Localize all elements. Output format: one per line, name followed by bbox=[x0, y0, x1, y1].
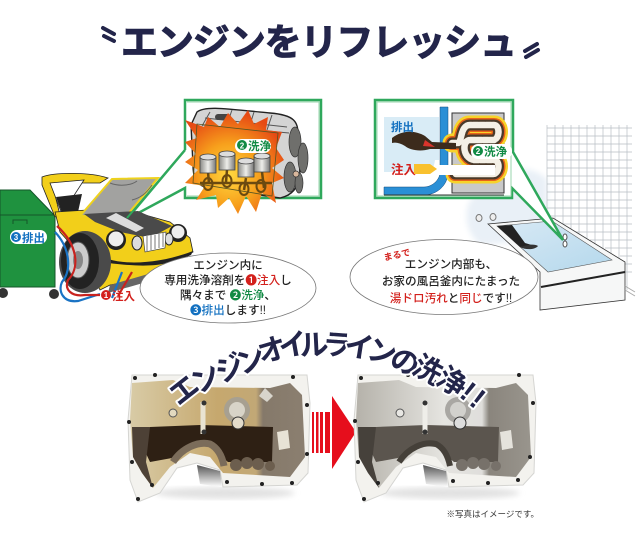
callout: engine explanation: 専用洗浄溶剤を❶注入し bbox=[164, 273, 292, 287]
panel: bathtub analogy bbox=[350, 100, 635, 314]
light blue water bbox=[384, 117, 439, 186]
panel: before and after oil pan bbox=[127, 328, 539, 519]
photo: before oil pan bbox=[127, 373, 310, 502]
arched heading: ン bbox=[186, 357, 228, 400]
icon: raised hood bbox=[80, 178, 158, 216]
photo: after oil pan bbox=[353, 373, 536, 502]
icon: bathtub bbox=[476, 214, 635, 310]
icon: engine block bbox=[185, 108, 308, 214]
icon: front wheel bbox=[59, 231, 111, 293]
headlights and grille bbox=[106, 224, 187, 252]
arched heading: イ bbox=[342, 330, 376, 366]
photo note: ※写真はイメージです。 bbox=[447, 509, 539, 519]
arched heading bbox=[163, 328, 491, 415]
oil passage bbox=[452, 125, 498, 174]
callout frame: pipe cutaway bbox=[375, 100, 563, 240]
label: injection: 1 bbox=[104, 291, 109, 300]
icon: flushing machine bbox=[0, 190, 59, 299]
label: injection: 注入 bbox=[391, 162, 417, 177]
arched heading: 浄 bbox=[431, 361, 473, 404]
label: wash badge bbox=[471, 144, 512, 159]
arched heading: 洗 bbox=[407, 349, 448, 392]
arrow: before to after bbox=[312, 396, 356, 469]
title opening marks bbox=[103, 28, 114, 41]
callout: engine explanation: 隅々まで ❷洗浄、 bbox=[180, 288, 276, 302]
title closing marks bbox=[525, 44, 538, 57]
title bbox=[103, 22, 538, 63]
arched heading: オ bbox=[254, 332, 291, 370]
arched heading: !! bbox=[454, 376, 491, 415]
arched heading: エ bbox=[163, 369, 206, 412]
soft shadows bbox=[155, 487, 295, 499]
label: discharge: 排出 bbox=[391, 120, 414, 134]
dark sludge outflow bbox=[392, 132, 456, 150]
blue pipe bbox=[384, 107, 448, 195]
callout: engine explanation: エンジン内に bbox=[193, 258, 263, 272]
callout: bath explanation: まるで bbox=[383, 247, 411, 263]
hoses bbox=[55, 226, 132, 301]
icon: yellow car bbox=[42, 150, 193, 303]
background blue cloud bbox=[467, 169, 547, 245]
label: injection bbox=[101, 289, 135, 303]
panel: car engine flush bbox=[0, 100, 321, 323]
label: wash badge: 2 bbox=[240, 142, 245, 150]
label: discharge badge bbox=[10, 230, 47, 245]
engine bay bbox=[84, 211, 172, 238]
callout: bath explanation bbox=[350, 240, 538, 314]
tile wall bbox=[547, 125, 632, 290]
callout: bath explanation: エンジン内部も、 bbox=[405, 257, 497, 271]
title text: エンジンをリフレッシュ bbox=[121, 22, 517, 63]
callout: engine explanation: ❸排出します!! bbox=[190, 303, 266, 317]
callout: bath explanation: お家の風呂釜内にたまった bbox=[382, 274, 520, 288]
arched heading: ン bbox=[232, 340, 271, 381]
arched heading: ン bbox=[364, 334, 400, 372]
arched heading: イ bbox=[276, 328, 310, 364]
callout frame: engine cutaway bbox=[127, 100, 321, 219]
callout: bath explanation: 湯ドロ汚れと同じです!! bbox=[390, 291, 512, 305]
callout: engine explanation bbox=[140, 253, 316, 323]
arched heading: ジ bbox=[210, 348, 251, 390]
label: discharge badge: 3 bbox=[14, 233, 19, 242]
icon: cooling fan bbox=[284, 127, 308, 193]
label: injection: 注入 bbox=[112, 289, 135, 303]
label: wash badge: 2 bbox=[476, 147, 481, 156]
arched heading: の bbox=[385, 343, 424, 383]
arched heading: ラ bbox=[321, 329, 353, 363]
grey engine wall bbox=[452, 113, 504, 193]
icon: callout pointer bbox=[127, 150, 185, 218]
white injection flow bbox=[435, 165, 495, 175]
label: wash badge bbox=[235, 139, 271, 153]
label: wash badge: 洗浄 bbox=[248, 139, 271, 153]
icon: pistons bbox=[200, 151, 272, 195]
injection arrow bbox=[414, 164, 437, 174]
icon: orange burst bbox=[185, 110, 284, 214]
label: wash badge: 洗浄 bbox=[484, 144, 507, 158]
arched heading: ル bbox=[299, 329, 329, 363]
label: discharge badge: 排出 bbox=[22, 231, 45, 245]
